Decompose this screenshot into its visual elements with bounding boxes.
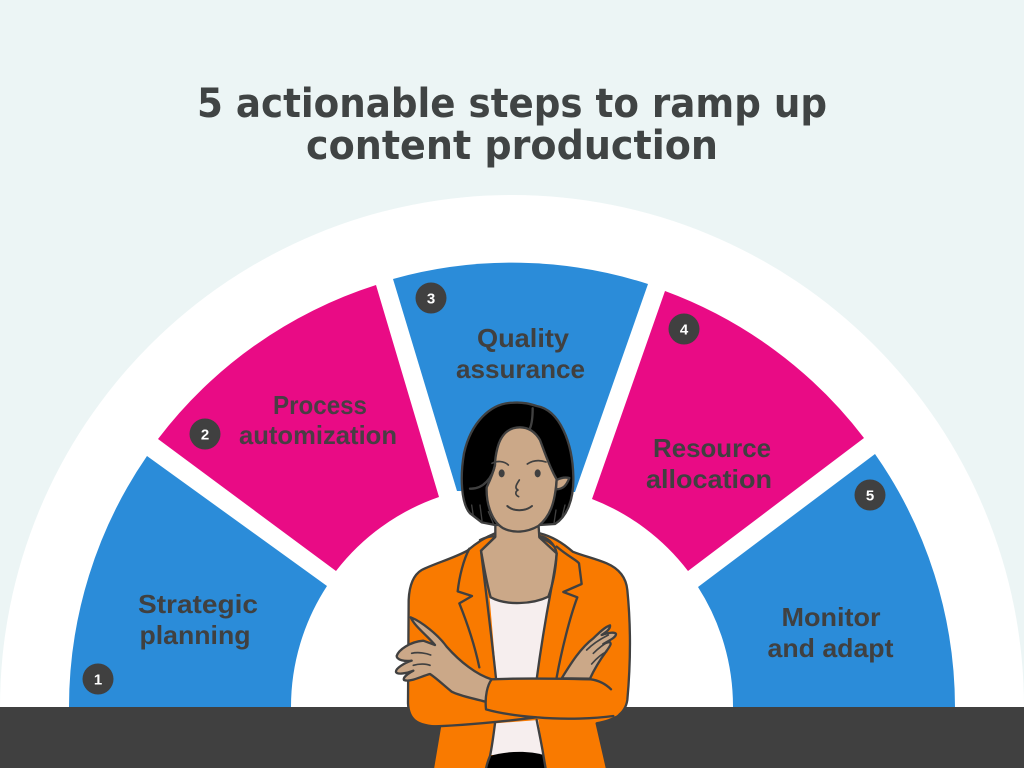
neck and chest — [481, 522, 557, 603]
hair — [462, 403, 573, 525]
step 3 badge — [416, 282, 446, 314]
step 3 badge: 3 — [427, 290, 435, 308]
title: 5 actionable steps to ramp up — [197, 81, 827, 127]
step 4 label — [646, 433, 772, 494]
step 1 label — [138, 589, 258, 650]
illustration: woman with crossed arms — [396, 403, 630, 768]
step 1 badge: 1 — [94, 672, 102, 688]
step 3 label: Quality — [477, 323, 570, 353]
face features — [492, 461, 546, 510]
step 2 badge — [190, 418, 220, 450]
step 3 label — [456, 323, 585, 384]
step 4 badge — [668, 314, 700, 344]
hair strands — [472, 505, 565, 523]
eyes — [499, 469, 505, 477]
title: content production — [306, 123, 718, 169]
step 2 badge: 2 — [201, 426, 209, 444]
segment 2: process automization — [158, 285, 439, 571]
trousers — [486, 752, 546, 768]
segment 5: monitor and adapt — [698, 454, 955, 707]
head — [487, 427, 557, 532]
eyebrows — [492, 461, 546, 465]
crossed forearm with left hand — [396, 617, 492, 702]
step 5 badge: 5 — [866, 488, 874, 504]
step 1 badge — [82, 664, 114, 694]
jacket fold lines — [423, 679, 613, 727]
white semicircle backdrop — [0, 195, 1024, 707]
step 5 label: and adapt — [768, 633, 894, 663]
step 5 badge — [854, 480, 886, 510]
right-side hand — [562, 625, 616, 679]
finger lines — [412, 635, 610, 665]
step 1 label: Strategic — [138, 589, 258, 619]
jacket — [408, 533, 630, 768]
step 5 label — [768, 602, 894, 663]
lapels — [458, 536, 582, 679]
ear — [556, 478, 569, 489]
segment 3: quality assurance — [393, 263, 648, 492]
step 5 label: Monitor — [782, 602, 880, 632]
mouth — [507, 506, 532, 510]
sleeve — [485, 679, 620, 719]
step 2 label: Process — [273, 390, 367, 420]
hair parting and fringe — [470, 408, 533, 489]
step 4 label: allocation — [646, 464, 772, 494]
segment 1: strategic planning — [69, 456, 327, 707]
step 2 label — [239, 390, 397, 450]
step 4 badge: 4 — [680, 322, 689, 338]
segment 4: resource allocation — [592, 291, 864, 571]
nose — [516, 480, 519, 497]
step 4 label: Resource — [653, 433, 771, 463]
step 2 label: automization — [239, 420, 397, 450]
step 1 label: planning — [140, 620, 250, 650]
dark floor band — [0, 707, 1024, 768]
step 3 label: assurance — [456, 354, 585, 384]
shirt — [489, 595, 549, 755]
title — [197, 81, 827, 169]
